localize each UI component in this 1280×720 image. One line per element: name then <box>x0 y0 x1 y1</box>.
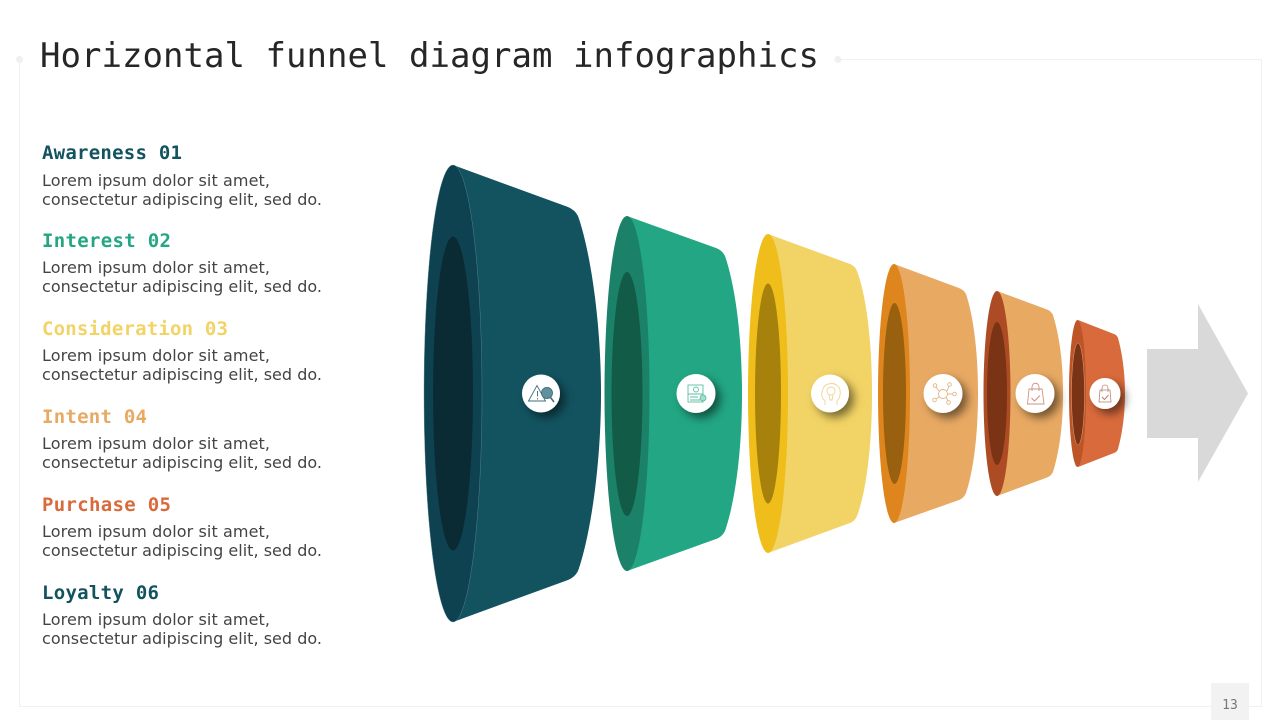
item: loyalty: consectetur adipiscing elit, sed do. <box>42 629 322 648</box>
icon: small shopping bag <box>1099 385 1111 402</box>
item: consideration: consectetur adipiscing elit, sed do. <box>42 365 322 384</box>
icon: document chart <box>688 385 706 402</box>
item: loyalty <box>42 582 322 648</box>
funnel segment 1 <box>424 165 601 622</box>
item: interest: Interest 02 <box>42 230 171 252</box>
funnel segment 3 <box>748 234 872 553</box>
page number <box>1211 683 1249 720</box>
icon: money network <box>933 383 956 404</box>
icon: warning and magnifier <box>528 386 554 402</box>
funnel diagram <box>424 165 1248 622</box>
icon: head with light bulb <box>822 384 840 405</box>
funnel segment 5 <box>984 291 1063 496</box>
item: awareness: Awareness 01 <box>42 142 182 164</box>
item: purchase: Purchase 05 <box>42 494 171 516</box>
item: awareness <box>42 142 322 209</box>
funnel segment 4 <box>878 264 978 523</box>
item: purchase: Lorem ipsum dolor sit amet, <box>42 522 270 541</box>
item: loyalty: Loyalty 06 <box>42 582 159 604</box>
page number: 13 <box>1222 698 1238 713</box>
item: purchase <box>42 494 322 560</box>
item: consideration: Consideration 03 <box>42 318 228 340</box>
item: loyalty: Lorem ipsum dolor sit amet, <box>42 610 270 629</box>
item: intent <box>42 406 322 472</box>
item: interest: Lorem ipsum dolor sit amet, <box>42 258 270 277</box>
item: intent: consectetur adipiscing elit, sed do. <box>42 453 322 472</box>
item: purchase: consectetur adipiscing elit, sed do. <box>42 541 322 560</box>
item: interest: consectetur adipiscing elit, sed do. <box>42 277 322 296</box>
text list <box>42 142 322 648</box>
item: awareness: Lorem ipsum dolor sit amet, <box>42 171 270 190</box>
funnel segment 6 <box>1069 320 1125 467</box>
item: awareness: consectetur adipiscing elit, sed do. <box>42 190 322 209</box>
item: intent: Intent 04 <box>42 406 147 428</box>
item: intent: Lorem ipsum dolor sit amet, <box>42 434 270 453</box>
item: interest <box>42 230 322 296</box>
arrow <box>1147 304 1248 482</box>
item: consideration <box>42 318 322 384</box>
title: Horizontal funnel diagram infographics <box>40 36 819 76</box>
funnel segment 2 <box>604 216 742 571</box>
item: consideration: Lorem ipsum dolor sit amet, <box>42 346 270 365</box>
icon: shopping bag <box>1028 383 1044 404</box>
